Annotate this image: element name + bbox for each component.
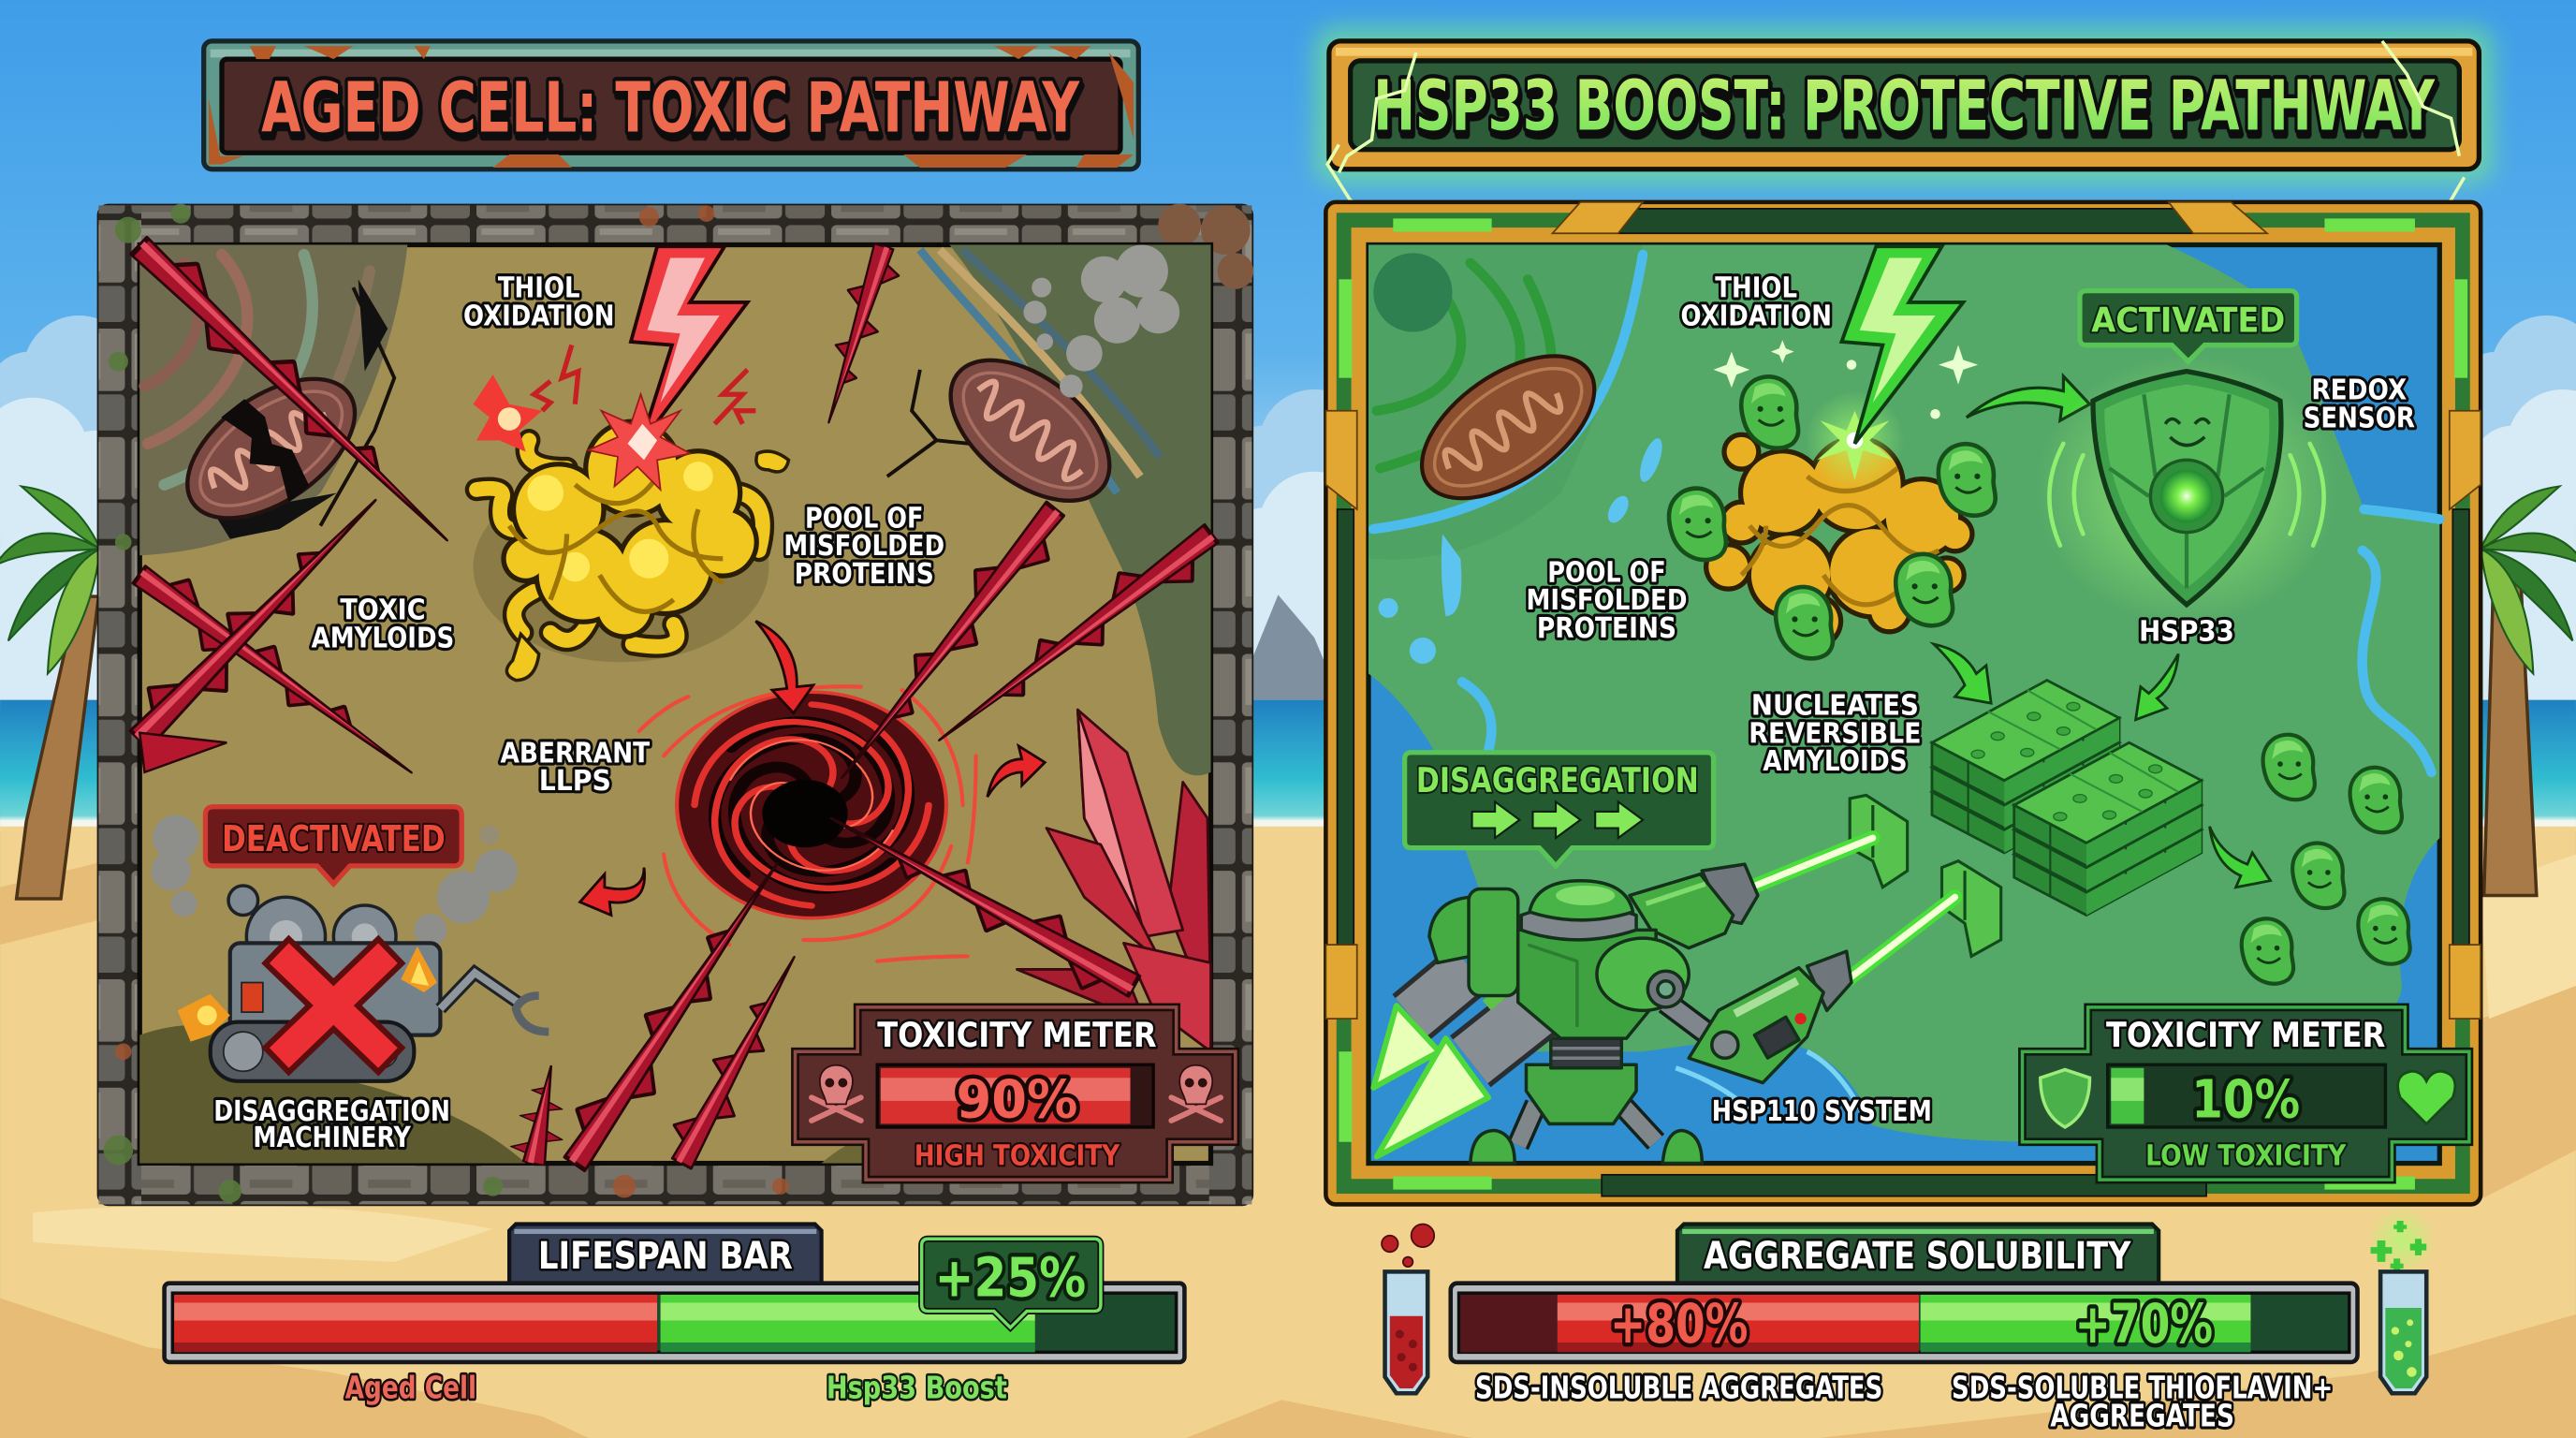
misfolded protein blob bbox=[474, 419, 788, 681]
label: hsp110 system: HSP110 SYSTEM bbox=[1712, 1095, 1932, 1128]
bar frame bbox=[1451, 1284, 2358, 1362]
misfolded protein blob with chaperones bbox=[1669, 376, 1996, 658]
label: disaggregation machinery: MACHINERY bbox=[253, 1122, 411, 1154]
label: toxic amyloids: TOXIC bbox=[340, 594, 426, 627]
label: pool of misfolded proteins: PROTEINS bbox=[795, 558, 934, 591]
label: redox sensor: SENSOR bbox=[2304, 402, 2415, 434]
robot arm and shoulder bbox=[1597, 938, 1719, 1042]
title banner: hsp33 boost bbox=[1314, 26, 2494, 250]
label: toxic amyloids bbox=[312, 594, 454, 654]
label: nucleates reversible amyloids: REVERSIBLE bbox=[1749, 717, 1922, 750]
mitochondrion: damaged left bbox=[161, 348, 380, 548]
aggregate solubility bar bbox=[1382, 1206, 2437, 1433]
black vortex: aberrant LLPS bbox=[639, 686, 976, 961]
heading tab: LIFESPAN BAR bbox=[538, 1234, 793, 1278]
toxicity meter: high: TOXICITY METER bbox=[877, 1015, 1157, 1055]
arrows row bbox=[1472, 801, 1643, 838]
icon: green lightning bbox=[1841, 246, 1963, 444]
callout: deactivated: DEACTIVATED bbox=[222, 818, 446, 860]
icon: green test tube bbox=[2367, 1206, 2437, 1393]
sparkles bbox=[1714, 340, 1978, 419]
robot torso bbox=[1429, 881, 1656, 1038]
label: redox sensor: REDOX bbox=[2311, 374, 2407, 406]
cell interior bbox=[139, 244, 1211, 1164]
callout: disaggregation: DISAGGREGATION bbox=[1416, 760, 1699, 800]
icon: skull left bbox=[812, 1065, 861, 1121]
label: soluble aggregates: AGGREGATES bbox=[2050, 1397, 2234, 1433]
arrow: to shield bbox=[1967, 376, 2089, 420]
label: insoluble aggregates: SDS-INSOLUBLE AGGREGATES bbox=[1475, 1370, 1882, 1406]
icon: skull right bbox=[1171, 1065, 1221, 1121]
free soluble proteins bbox=[2242, 735, 2410, 984]
toxicity meter: low: TOXICITY METER bbox=[2106, 1015, 2385, 1055]
gold and green frame bbox=[1325, 202, 2481, 1204]
label: toxic amyloids: AMYLOIDS bbox=[312, 622, 454, 654]
toxicity meter: low bbox=[2022, 1007, 2469, 1180]
toxicity meter: low: 10% bbox=[2191, 1069, 2300, 1130]
robot legs and feet bbox=[1471, 1038, 1702, 1164]
icon: heart bbox=[2398, 1071, 2455, 1123]
callout: activated bbox=[2080, 291, 2297, 361]
insoluble segment bbox=[1558, 1292, 1919, 1356]
toxicity meter: low: LOW TOXICITY bbox=[2145, 1139, 2347, 1172]
label: nucleates reversible amyloids bbox=[1749, 689, 1922, 778]
bar frame bbox=[165, 1284, 1184, 1362]
label: nucleates reversible amyloids: AMYLOIDS bbox=[1763, 745, 1908, 778]
label: pool of misfolded proteins: PROTEINS bbox=[1537, 612, 1676, 645]
cell interior bbox=[1368, 244, 2439, 1164]
callout: +25% bbox=[922, 1239, 1101, 1328]
callout: deactivated bbox=[205, 807, 461, 884]
arrows: green flow bbox=[1934, 644, 2271, 888]
label: thiol oxidation: THIOL bbox=[1715, 272, 1797, 305]
toxic amyloid spikes bbox=[118, 227, 1227, 1179]
label: pool of misfolded proteins bbox=[783, 502, 944, 591]
crystals: red toxic shards bbox=[1017, 710, 1211, 1051]
robot cannon lower bbox=[1689, 951, 1852, 1083]
label: hsp33: HSP33 bbox=[2139, 615, 2234, 648]
robot cannon upper bbox=[1630, 864, 1758, 948]
label: aberrant llps bbox=[500, 737, 651, 798]
icon: red test tube bbox=[1382, 1224, 1434, 1393]
label: nucleates reversible amyloids: NUCLEATES bbox=[1751, 689, 1919, 722]
amyloid fragments and laser beams bbox=[1751, 795, 2001, 979]
callout: activated: ACTIVATED bbox=[2091, 301, 2285, 341]
lifespan bar bbox=[165, 1224, 1184, 1406]
hsp33 segment bbox=[661, 1295, 1035, 1352]
icon: shield small bbox=[2041, 1070, 2089, 1127]
toxicity meter: high: HIGH TOXICITY bbox=[915, 1139, 1120, 1172]
label: hsp33 boost: Hsp33 Boost bbox=[827, 1370, 1007, 1406]
stone frame bbox=[98, 204, 1253, 1204]
label: pool of misfolded proteins: MISFOLDED bbox=[1526, 584, 1687, 617]
heading tab bbox=[509, 1224, 822, 1284]
soluble segment: +70% bbox=[2075, 1292, 2213, 1356]
label: aged cell: Aged Cell bbox=[345, 1370, 476, 1406]
aged cell segment bbox=[174, 1295, 657, 1352]
broken disaggregation machine bbox=[152, 814, 549, 1081]
label: disaggregation machinery: DISAGGREGATION bbox=[213, 1095, 450, 1128]
heading tab: AGGREGATE SOLUBILITY bbox=[1704, 1234, 2131, 1278]
hsp110 robot bbox=[1373, 864, 1852, 1164]
label: soluble aggregates: SDS-SOLUBLE THIOFLAVIN+ bbox=[1952, 1370, 2333, 1406]
soluble segment bbox=[1921, 1292, 2250, 1356]
label: thiol oxidation: OXIDATION bbox=[463, 300, 614, 332]
title text: AGED CELL: TOXIC PATHWAY bbox=[261, 68, 1080, 148]
callout: disaggregation bbox=[1405, 753, 1714, 866]
label: pool of misfolded proteins: MISFOLDED bbox=[783, 530, 944, 563]
toxicity meter: high: 90% bbox=[956, 1069, 1077, 1130]
label: aberrant llps: ABERRANT bbox=[500, 737, 651, 770]
label: redox sensor bbox=[2304, 374, 2415, 434]
panel: aged cell toxic pathway bbox=[98, 204, 1253, 1204]
reversible amyloid brick stacks bbox=[1932, 681, 2202, 916]
panel: hsp33 protective pathway bbox=[1325, 202, 2481, 1204]
label: thiol oxidation bbox=[1680, 272, 1832, 332]
robot boosters bbox=[1373, 968, 1541, 1157]
title banner: aged cell bbox=[204, 41, 1138, 169]
mitochondrion: smoking right bbox=[925, 244, 1179, 529]
label: thiol oxidation: THIOL bbox=[498, 272, 580, 305]
icon: hsp33 shield redox sensor bbox=[2036, 355, 2337, 624]
heading tab bbox=[1677, 1224, 2159, 1284]
label: thiol oxidation bbox=[463, 272, 614, 332]
label: soluble aggregates bbox=[1952, 1370, 2333, 1433]
mitochondrion: healthy bbox=[1398, 328, 1619, 527]
callout: +25%: +25% bbox=[935, 1246, 1086, 1310]
label: pool of misfolded proteins: POOL OF bbox=[805, 502, 923, 535]
label: pool of misfolded proteins bbox=[1526, 556, 1687, 645]
arrows: swirl flow bbox=[580, 621, 1045, 916]
icon: red X bbox=[289, 962, 378, 1049]
electric sparks bbox=[1327, 41, 2465, 250]
label: aberrant llps: LLPS bbox=[539, 765, 611, 798]
icon: red lightning bbox=[474, 246, 755, 490]
label: pool of misfolded proteins: POOL OF bbox=[1547, 556, 1666, 589]
toxicity meter: high bbox=[795, 1007, 1236, 1180]
label: thiol oxidation: OXIDATION bbox=[1680, 300, 1832, 332]
label: disaggregation machinery bbox=[213, 1095, 450, 1154]
insoluble segment: +80% bbox=[1610, 1292, 1748, 1356]
